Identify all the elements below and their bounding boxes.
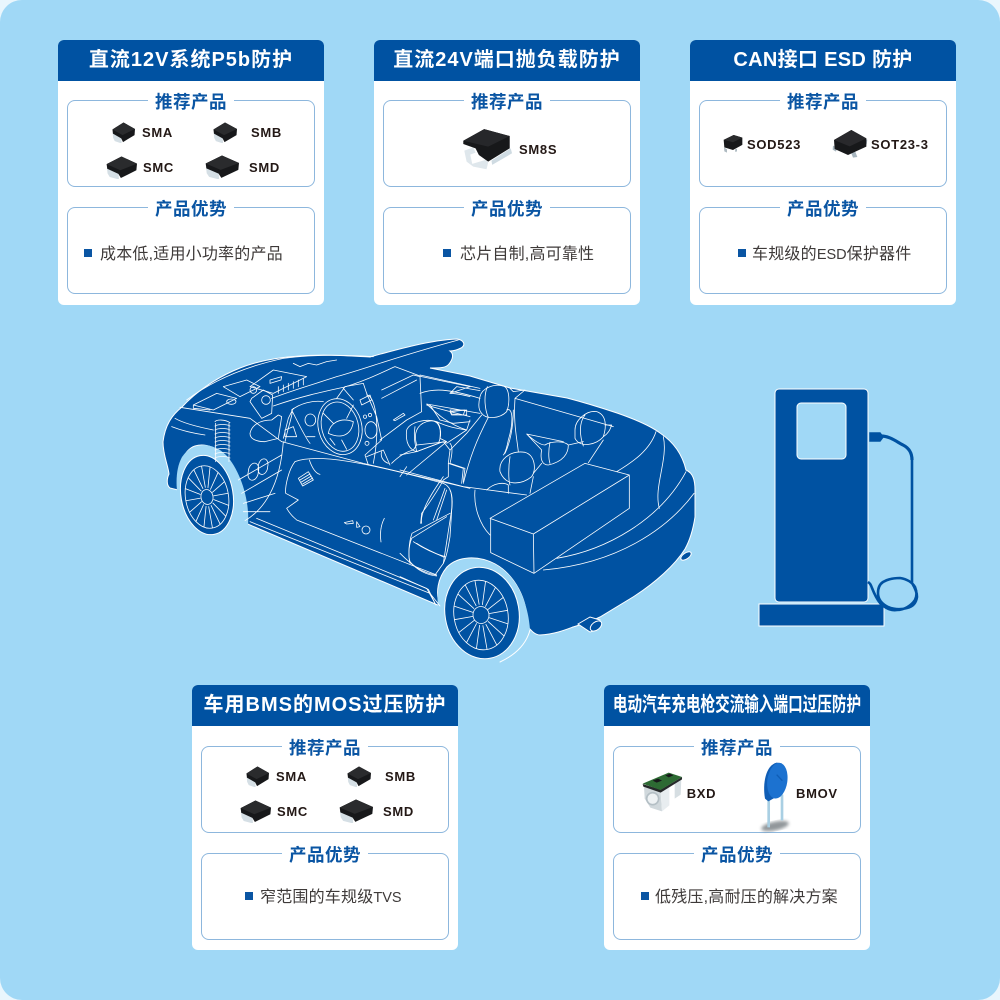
charging pile: [759, 389, 917, 626]
product advantages box: [699, 207, 947, 294]
panel: EV charging gun AC input protection: [604, 685, 870, 950]
section heading: 推荐产品: [701, 738, 773, 758]
panel: CAN ESD protection: [690, 40, 956, 305]
product: SMD: [206, 156, 280, 179]
car: [163, 339, 695, 665]
product: SMC: SMC: [143, 160, 174, 175]
product: SMC: SMC: [277, 804, 308, 819]
rear half line work: [400, 375, 694, 603]
product: SOT23-3: SOT23-3: [871, 137, 929, 152]
panel: 24V load dump protection: [374, 40, 640, 305]
recommended products box: [699, 100, 947, 187]
product: SMD: SMD: [249, 160, 280, 175]
product: SMA: SMA: [276, 769, 307, 784]
product: BMOV: [760, 762, 838, 834]
recommended products box: [383, 100, 631, 187]
panel heading: 电动汽车充电枪交流输入端口过压防护: [613, 694, 861, 716]
product: SOD523: [724, 135, 801, 152]
panel heading: [604, 685, 870, 726]
panel heading: [58, 40, 324, 81]
advantage text: 窄范围的车规级TVS: [260, 889, 402, 906]
pile body: [775, 389, 868, 602]
advantage text: 低残压,高耐压的解决方案: [655, 889, 838, 906]
section heading: 产品优势: [787, 199, 859, 219]
section heading: 推荐产品: [289, 738, 361, 758]
section heading: 产品优势: [701, 845, 773, 865]
panel heading: 直流12V系统P5b防护: [89, 49, 293, 71]
car rear reflector: [679, 550, 693, 562]
front wheel: [174, 445, 248, 539]
product: SMB: [348, 766, 416, 787]
pile base: [759, 604, 884, 626]
product: SMB: SMB: [251, 125, 282, 140]
section heading: 推荐产品: [471, 92, 543, 112]
advantage text: 成本低,适用小功率的产品: [100, 246, 283, 263]
panel heading: 车用BMS的MOS过压防护: [204, 694, 446, 716]
front half line work: [172, 340, 470, 606]
recommended products box: [201, 746, 449, 833]
advantage text: 车规级的ESD保护器件: [752, 246, 911, 263]
product advantages box: [201, 853, 449, 940]
panel heading: [192, 685, 458, 726]
recommended products box: [67, 100, 315, 187]
product: SMC: [106, 156, 174, 179]
product: BXD: [642, 772, 716, 812]
product: SMD: [340, 800, 414, 823]
product: SOT23-3: [832, 130, 929, 158]
product: SMA: SMA: [142, 125, 173, 140]
product: SM8S: SM8S: [519, 142, 557, 157]
product: SMC: [240, 800, 308, 823]
product advantages box: [383, 207, 631, 294]
section heading: 产品优势: [471, 199, 543, 219]
section heading: 产品优势: [155, 199, 227, 219]
section heading: 推荐产品: [155, 92, 227, 112]
product advantages box: [613, 853, 861, 940]
product: SM8S: [463, 129, 557, 170]
product: BMOV: BMOV: [796, 786, 838, 801]
product: SMB: [214, 122, 282, 143]
advantage text: 芯片自制,高可靠性: [460, 246, 594, 263]
panel heading: CAN接口 ESD 防护: [733, 49, 913, 71]
panel: 12V P5b protection: [58, 40, 324, 305]
car body silhouette: [163, 339, 695, 635]
car exhaust: [578, 617, 604, 633]
product: SMD: SMD: [383, 804, 414, 819]
product: SOD523: SOD523: [747, 137, 801, 152]
panel: BMS MOS overvoltage protection: [192, 685, 458, 950]
panel heading: [690, 40, 956, 81]
recommended products box: [613, 746, 861, 833]
section heading: 推荐产品: [787, 92, 859, 112]
charging gun and cable: [868, 433, 917, 610]
product: SMA: [246, 766, 307, 787]
product: SMA: [112, 122, 173, 143]
section heading: 产品优势: [289, 845, 361, 865]
panel heading: [374, 40, 640, 81]
product: BXD: BXD: [687, 786, 716, 801]
panel heading: 直流24V端口抛负载防护: [393, 49, 621, 71]
product advantages box: [67, 207, 315, 294]
product: SMB: SMB: [385, 769, 416, 784]
rear wheel: [438, 559, 530, 665]
